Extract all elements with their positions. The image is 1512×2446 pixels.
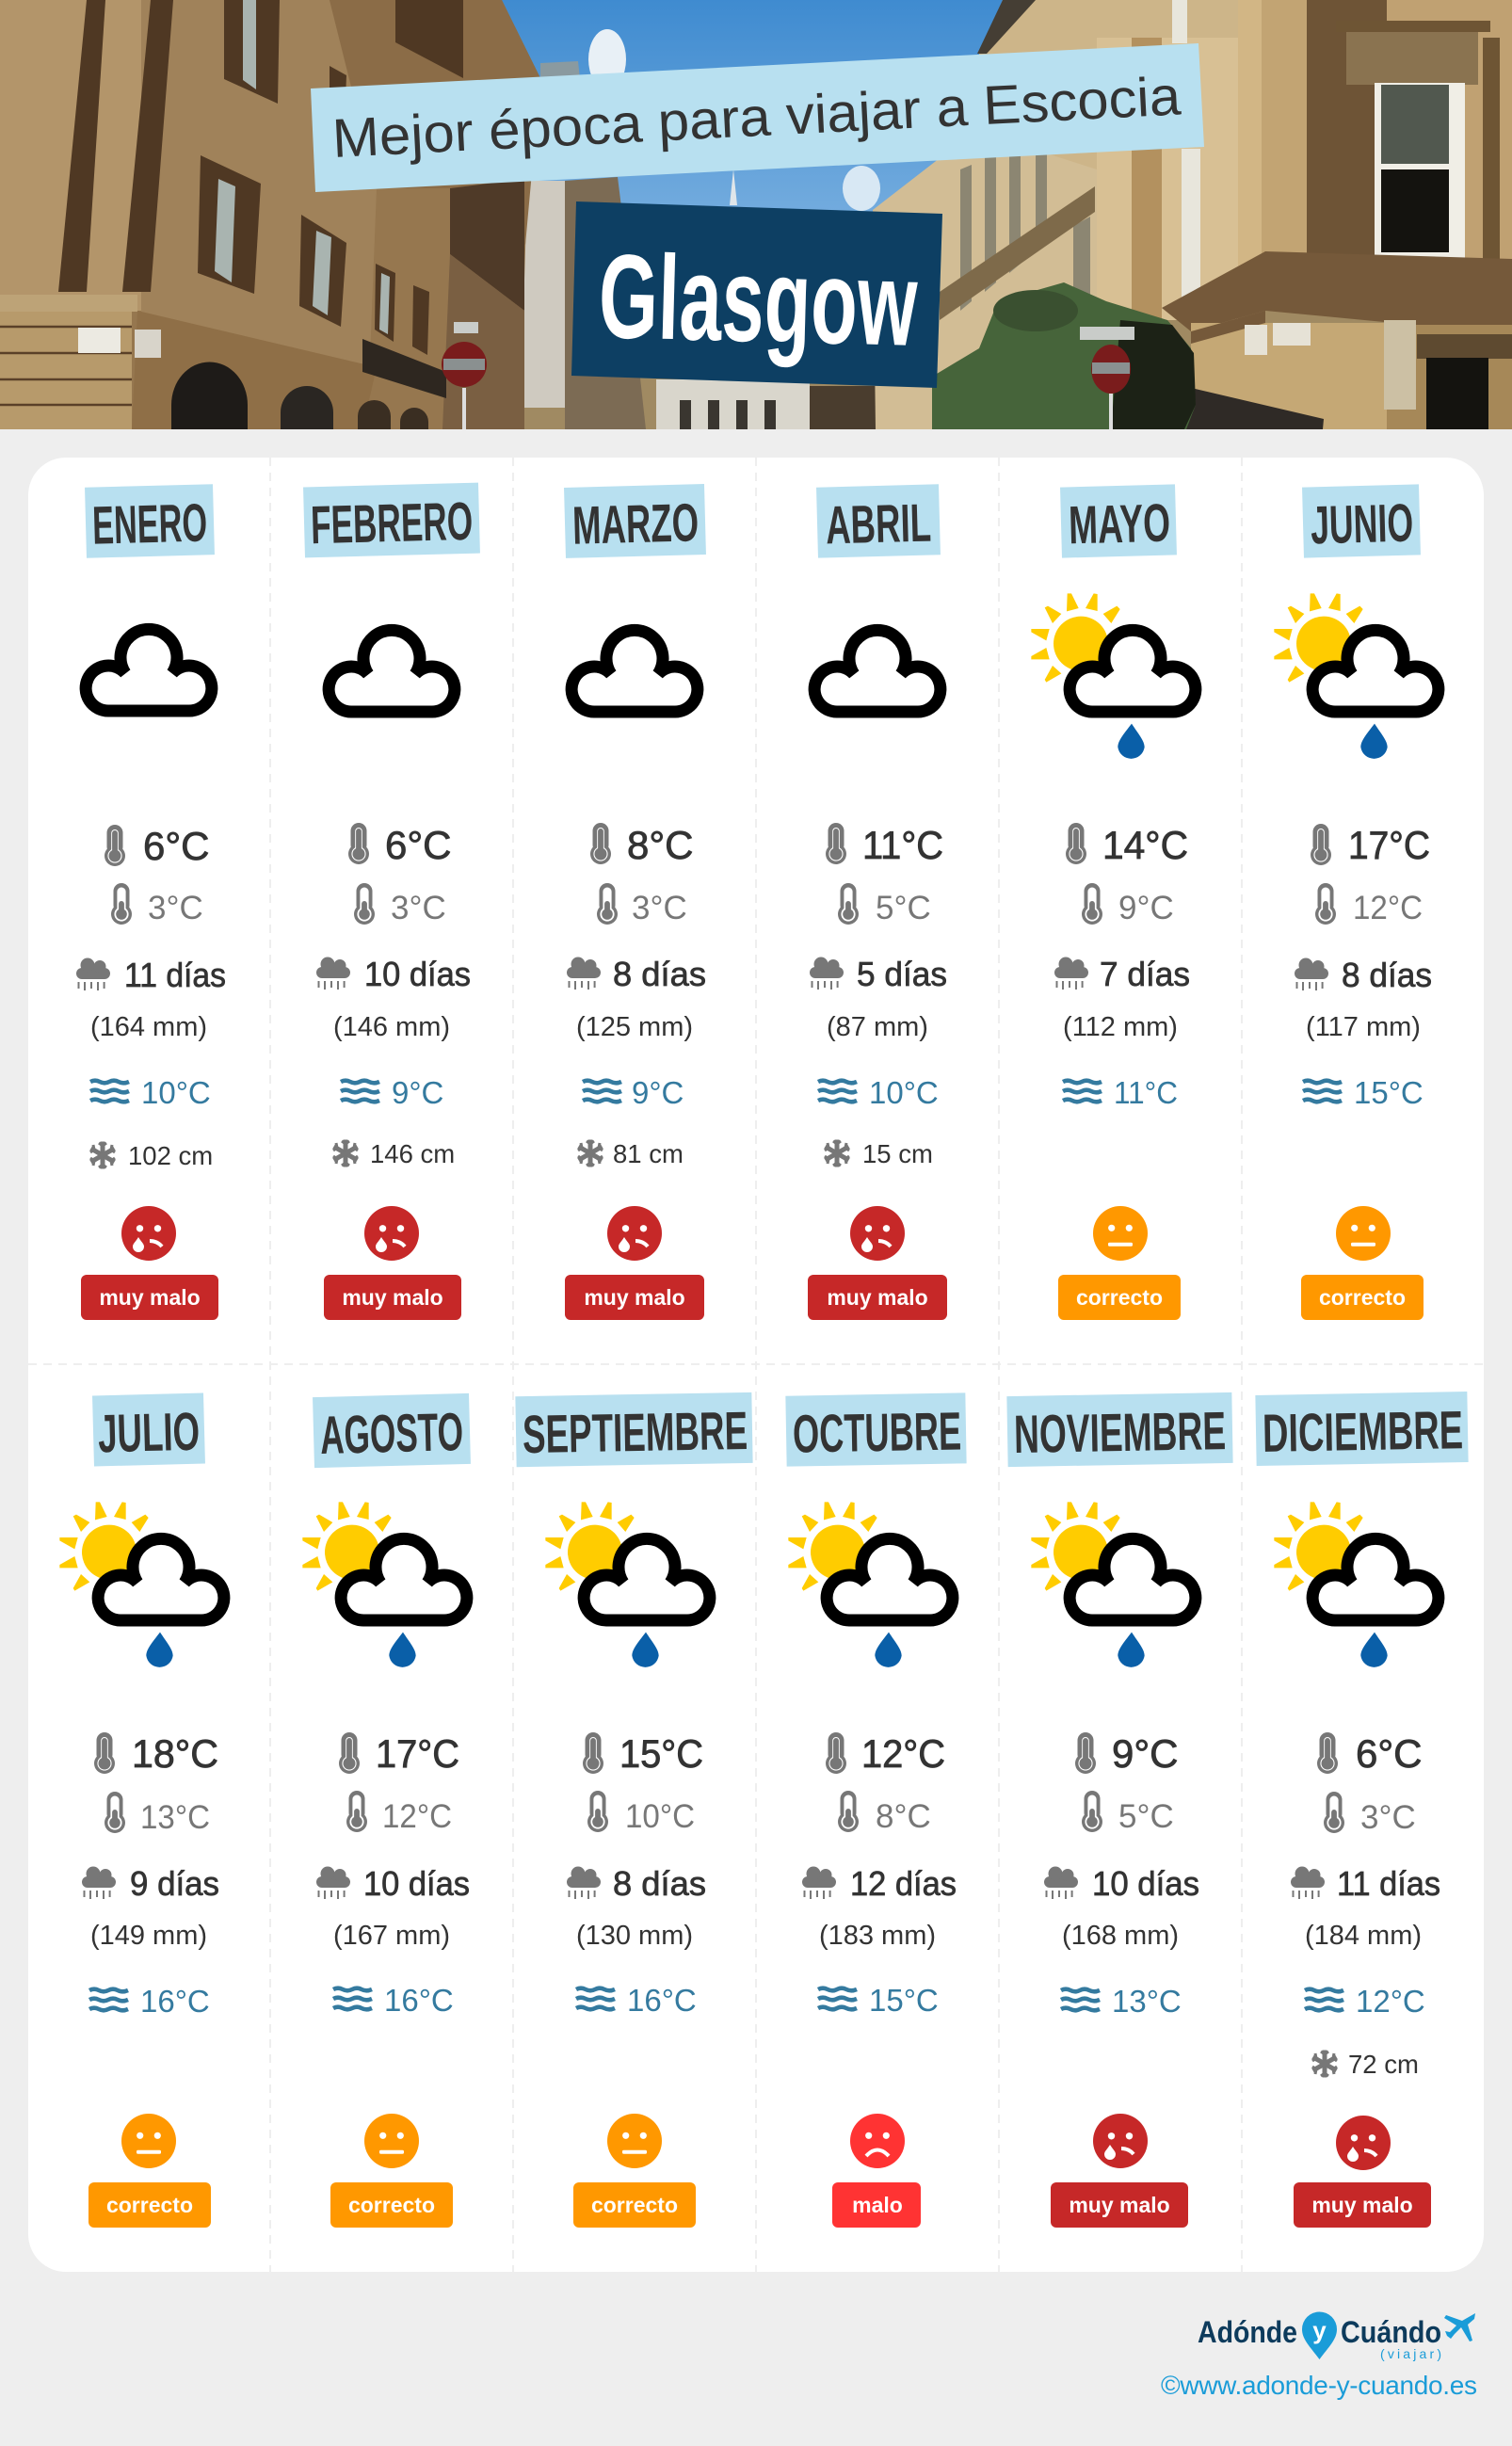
header photo: Glasgow street [0,0,1512,429]
max temperature: 6°C [1356,1731,1422,1776]
rainy days: 12 días [850,1864,957,1903]
logo: Adónde y Cuándo: Adónde [1198,2315,1297,2349]
max temperature [105,824,209,868]
rating: correcto: correcto [1076,1285,1163,1310]
month label: julio: JULIO [97,1402,201,1464]
rating: correcto [1301,1275,1424,1320]
tree [932,282,1196,429]
month label: noviembre [1006,1392,1233,1467]
rainy days: 8 días [613,1864,706,1903]
month label: julio [92,1392,205,1467]
rainy days: 10 días [1092,1864,1199,1903]
weather icon: sun, cloud and rain [788,1502,953,1667]
snow: 102 cm [128,1141,213,1170]
rating: correcto [88,2182,211,2228]
rainfall: (164 mm) [90,1012,207,1042]
snow: 146 cm [370,1139,455,1168]
sea temperature: 13°C [1112,1984,1182,2019]
sea temperature: 12°C [1356,1984,1425,2019]
left building [0,0,540,429]
rating: muy malo [1051,2182,1188,2228]
rainy days: 9 días [130,1864,219,1903]
rainy days: 7 días [1100,955,1190,993]
month label: mayo [1060,484,1177,558]
rainy days [1044,1864,1199,1903]
min temperature [1324,1792,1416,1836]
max temperature [1317,1731,1422,1776]
max temperature: 6°C [143,824,209,868]
column: abril [808,484,947,1320]
sea temperature: 9°C [392,1075,443,1110]
snow [333,1139,455,1168]
sea temperature [1305,1984,1425,2019]
max temperature: 15°C [619,1731,703,1776]
face: muy malo [850,1206,905,1261]
min temperature [105,1792,210,1836]
white card panel [28,458,1484,2272]
weather icon: cloud [329,630,455,712]
snow [825,1139,933,1168]
min temperature: 12°C [1353,890,1423,926]
month label: febrero [303,483,480,557]
rainfall: (149 mm) [90,1921,207,1951]
rainy days [1054,955,1190,993]
sea temperature [333,1983,454,2018]
rating: correcto: correcto [106,2193,193,2217]
weather icon: sun, cloud and rain [302,1502,467,1667]
sea temperature [818,1075,939,1110]
rating: muy malo: muy malo [1069,2193,1170,2217]
snow [1312,2050,1419,2079]
rainfall: (112 mm) [1063,1012,1178,1042]
logo: Adónde y Cuándo: (viajar) [1380,2346,1441,2361]
min temperature [597,883,687,926]
weather icon: cloud [571,630,698,712]
month label: abril [816,484,941,558]
face: muy malo [607,1206,662,1261]
rainy days: 10 días [364,955,471,993]
min temperature [1315,883,1423,926]
min temperature: 10°C [625,1798,695,1835]
max temperature: 17°C [376,1731,459,1776]
min temperature [838,883,931,926]
face: correcto [364,2114,419,2168]
city banner: Glasgow [571,201,942,388]
snow [578,1139,684,1168]
rating: muy malo: muy malo [99,1285,201,1310]
min temperature: 12°C [382,1798,452,1835]
column: septiembre [515,1392,753,2228]
min temperature: 9°C [1118,890,1174,926]
max temperature [348,823,452,867]
weather icon: cloud [814,630,941,712]
rainfall: (167 mm) [333,1921,450,1951]
sea temperature [1061,1984,1182,2019]
sea temperature: 15°C [869,1983,939,2018]
month label: mayo: MAYO [1068,493,1171,555]
max temperature [94,1731,218,1776]
sea temperature [576,1983,697,2018]
column: febrero [303,483,480,1320]
sea temperature: 16°C [627,1983,697,2018]
weather icon: sun, cloud and rain [545,1502,710,1667]
rainy days: 8 días [613,955,706,993]
column: julio [59,1392,224,2228]
max temperature [583,1731,703,1776]
max temperature [826,1731,945,1776]
month label: febrero: FEBRERO [310,491,474,555]
city banner: Glasgow: Glasgow [597,229,920,371]
rainy days [82,1864,219,1903]
sea temperature: 10°C [869,1075,939,1110]
sea temperature [1063,1075,1178,1110]
rainfall: (117 mm) [1306,1012,1421,1042]
rating: muy malo: muy malo [584,1285,685,1310]
column: enero [76,484,226,1320]
face: correcto [607,2114,662,2168]
rainy days: 8 días [1342,956,1432,994]
snow: 81 cm [613,1139,684,1168]
column: agosto [302,1393,471,2228]
sea temperature [818,1983,939,2018]
rating: correcto: correcto [348,2193,435,2217]
min temperature: 3°C [148,890,203,926]
min temperature: 8°C [876,1798,931,1835]
max temperature [590,823,693,867]
icon: plane [1444,2313,1475,2341]
max temperature: 8°C [627,823,693,867]
min temperature [346,1791,452,1835]
column: octubre [785,1392,967,2228]
rating: correcto: correcto [591,2193,678,2217]
rainfall: (146 mm) [333,1012,450,1042]
face: correcto [1093,1206,1148,1261]
sea temperature: 11°C [1114,1075,1178,1110]
rainfall: (125 mm) [576,1012,693,1042]
face: muy malo [1336,2116,1391,2170]
column: mayo [1031,484,1196,1320]
column: junio [1274,484,1439,1320]
rating: muy malo: muy malo [827,1285,928,1310]
min temperature: 5°C [1118,1798,1174,1835]
weather icon: cloud [86,629,212,711]
max temperature [1311,823,1430,867]
min temperature [111,883,203,926]
max temperature: 6°C [385,823,452,867]
sea temperature [90,1075,211,1110]
max temperature: 18°C [132,1731,218,1776]
rainy days: 11 días [1337,1864,1440,1903]
month label: enero: ENERO [91,492,208,556]
max temperature [1075,1731,1179,1776]
icon: map pin [1302,2312,1337,2359]
min temperature [587,1791,695,1835]
rainy days [316,955,471,993]
rainfall: (168 mm) [1062,1921,1179,1951]
column: marzo [564,484,706,1320]
min temperature: 13°C [140,1799,210,1836]
rating: malo: malo [852,2193,903,2217]
face: muy malo [121,1206,176,1261]
column: diciembre [1255,1392,1469,2228]
rainy days [567,955,706,993]
title banner [311,43,1204,192]
rating: muy malo: muy malo [342,1285,443,1310]
column: noviembre [1006,1392,1233,2228]
weather icon: sun, cloud and rain [59,1502,224,1667]
rating: correcto [573,2182,696,2228]
rainy days: 10 días [363,1864,470,1903]
month label: marzo: MARZO [571,492,700,556]
website url: ©www.adonde-y-cuando.es [1161,2371,1477,2400]
rating: muy malo [565,1275,704,1320]
rainy days: 11 días [124,956,226,994]
month label: agosto: AGOSTO [319,1402,464,1466]
sea temperature: 15°C [1354,1075,1424,1110]
max temperature: 9°C [1112,1731,1179,1776]
month label: junio: JUNIO [1310,493,1414,555]
month label: octubre [785,1392,967,1467]
month label: marzo [564,484,706,558]
weather icon: sun, cloud and rain [1274,1502,1439,1667]
rainfall: (183 mm) [819,1921,936,1951]
right buildings [873,113,1196,429]
rating: muy malo [324,1275,461,1320]
rating: muy malo: muy malo [1311,2193,1413,2217]
max temperature: 12°C [861,1731,945,1776]
face: malo [850,2114,905,2168]
rainy days [567,1864,706,1903]
weather icon: sun, cloud and rain [1274,593,1439,759]
min temperature: 5°C [876,890,931,926]
min temperature [838,1791,931,1835]
sea temperature: 16°C [384,1983,454,2018]
face: correcto [121,2114,176,2168]
sea temperature: 16°C [140,1984,210,2019]
sea temperature [341,1075,443,1110]
rainy days [316,1864,470,1903]
max temperature: 17°C [1348,823,1430,867]
min temperature: 3°C [391,890,446,926]
month label: septiembre [515,1392,753,1467]
min temperature [1082,883,1174,926]
rainfall: (87 mm) [827,1012,928,1042]
rating: muy malo [808,1275,947,1320]
logo: Adónde y Cuándo: Cuándo [1341,2315,1441,2349]
title banner: Mejor época para viajar a Escocia [330,65,1182,169]
max temperature [339,1731,459,1776]
month label: junio [1302,484,1421,558]
min temperature: 3°C [1360,1799,1416,1836]
face: muy malo [1093,2114,1148,2168]
max temperature: 11°C [862,823,943,867]
sea temperature [89,1984,210,2019]
weather icon: sun, cloud and rain [1031,1502,1196,1667]
min temperature: 3°C [632,890,687,926]
snow [90,1141,213,1170]
icon: map pin: y [1312,2316,1327,2344]
month label: septiembre: SEPTIEMBRE [523,1401,748,1465]
max temperature: 14°C [1102,823,1188,867]
rainy days [802,1864,957,1903]
min temperature [354,883,446,926]
rating: correcto [1058,1275,1181,1320]
month label: agosto [313,1393,471,1468]
month label: abril: ABRIL [825,493,932,555]
max temperature [1066,823,1188,867]
rainy days [1291,1864,1440,1903]
rating: muy malo [1294,2182,1431,2228]
snow: 72 cm [1348,2050,1419,2079]
rating: correcto: correcto [1319,1285,1406,1310]
sea temperature: 9°C [632,1075,684,1110]
logo: Adónde y Cuándo [1198,2312,1475,2361]
max temperature [826,823,943,867]
rainy days [76,956,226,994]
rainy days: 5 días [857,955,947,993]
rainfall: (184 mm) [1305,1921,1422,1951]
sea temperature: 10°C [141,1075,211,1110]
min temperature [1082,1791,1174,1835]
rainfall: (130 mm) [576,1921,693,1951]
sea temperature [1303,1075,1424,1110]
weather icon: sun, cloud and rain [1031,593,1196,759]
rating: muy malo [81,1275,218,1320]
rainy days [1295,956,1432,994]
sea temperature [583,1075,684,1110]
month label: octubre: OCTUBRE [793,1401,962,1465]
face: muy malo [364,1206,419,1261]
rating: malo [832,2182,921,2228]
rainy days [810,955,947,993]
face: correcto [1336,1206,1391,1261]
snow: 15 cm [862,1139,933,1168]
month label: enero [85,484,215,558]
rating: correcto [330,2182,453,2228]
month label: noviembre: NOVIEMBRE [1014,1401,1227,1465]
